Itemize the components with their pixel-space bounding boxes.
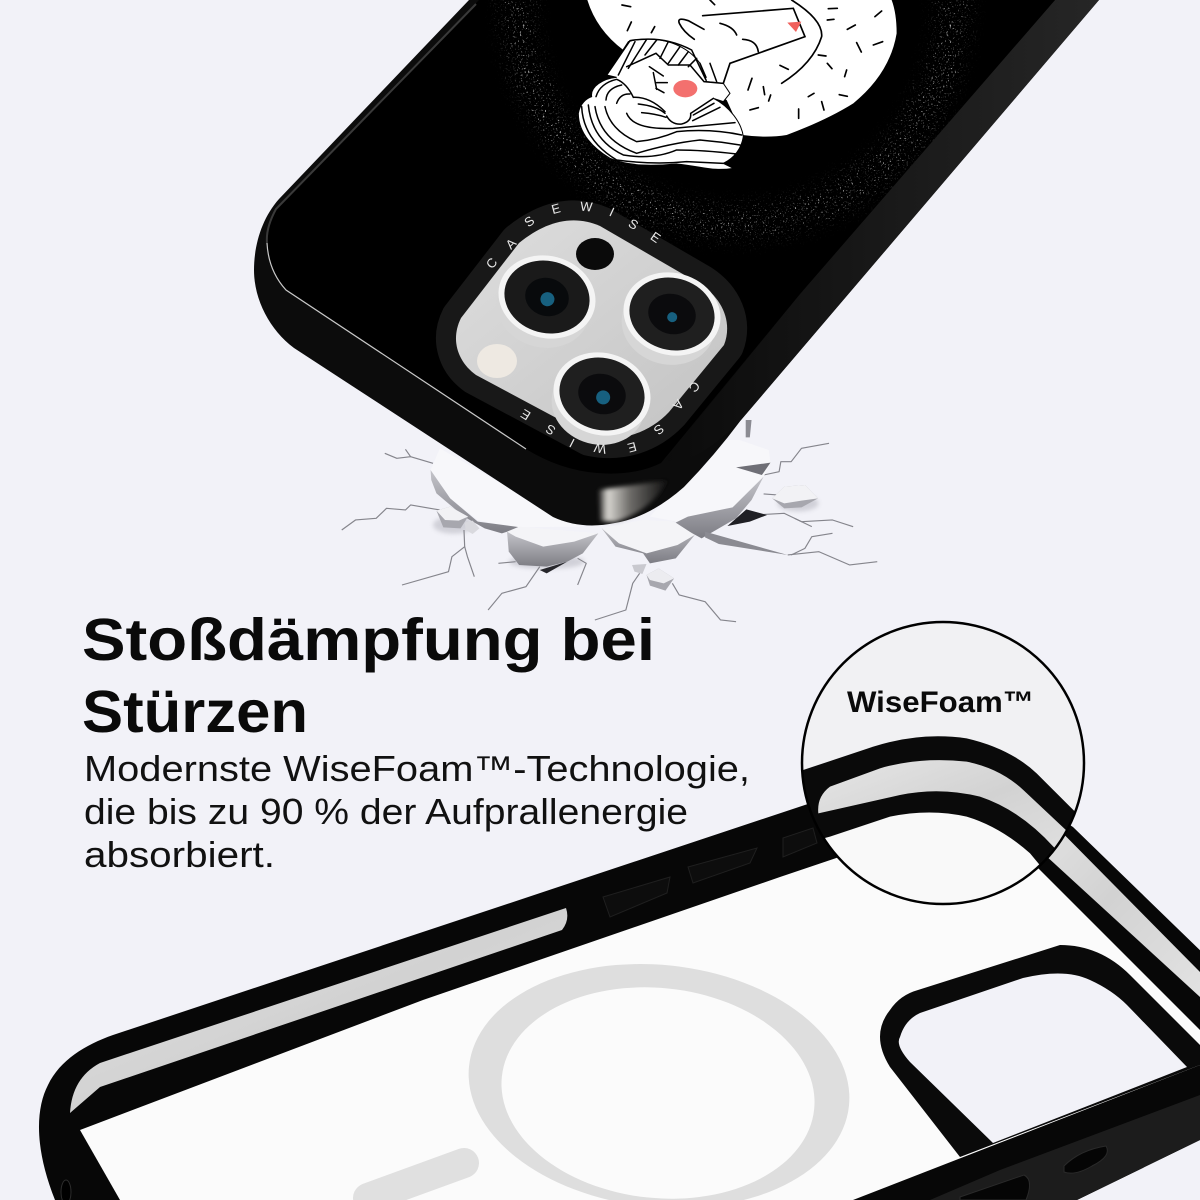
upper phone in black case (254, 0, 1099, 525)
bottom speaker ports (960, 1146, 1107, 1200)
CASEWISE ring lettering top: S (521, 213, 538, 230)
CASEWISE ring lettering bottom: S (650, 421, 667, 438)
gloss edge (267, 4, 476, 243)
illustration: moon character (578, 0, 897, 169)
CASEWISE ring lettering top (487, 202, 661, 268)
flash (477, 344, 517, 378)
heading (82, 607, 655, 745)
CASEWISE ring lettering bottom: S (543, 421, 558, 438)
speckle halo (517, 0, 953, 223)
bottom band sheen (930, 1095, 1200, 1200)
face lines (622, 0, 883, 118)
CASEWISE ring lettering top: A (502, 235, 519, 252)
left port (61, 1180, 71, 1200)
magsafe ring centre (502, 987, 814, 1199)
magnified corner (803, 736, 1074, 867)
white blob (587, 0, 897, 137)
hair shape (578, 39, 743, 169)
camera island (456, 199, 730, 457)
camera cutout frame (880, 945, 1200, 1157)
circle outline (802, 622, 1084, 904)
left plate edge (431, 470, 521, 533)
side band (740, 0, 1099, 421)
magnifier callout: WiseFoam (800, 620, 1086, 906)
dark wedges (727, 509, 767, 526)
heading: Stürzen (82, 679, 308, 745)
CASEWISE ring lettering top: E (550, 200, 562, 217)
CASEWISE ring lettering top: S (626, 216, 641, 233)
CASEWISE ring lettering top: E (648, 229, 664, 246)
right plate edge (674, 477, 764, 538)
clear back (80, 850, 1200, 1200)
CASEWISE ring lettering bottom: I (567, 436, 577, 451)
CASEWISE ring lettering top: C (483, 255, 500, 272)
callout label: WiseFoam™ (847, 686, 1034, 719)
CASEWISE ring lettering bottom: E (518, 406, 533, 423)
side buttons (603, 828, 817, 917)
red cheek (673, 80, 697, 97)
soft shadows (433, 495, 819, 569)
CASEWISE ring lettering bottom: A (670, 397, 687, 413)
foam gap left (70, 908, 567, 1113)
CASEWISE ring lettering top: I (607, 204, 617, 219)
metal plate with ring border (456, 220, 727, 438)
small stones (436, 485, 818, 591)
lens 2 (624, 272, 720, 365)
back panel (267, 0, 1055, 474)
microphone hole (576, 238, 614, 270)
fragment left (507, 527, 598, 567)
black frame (39, 780, 1200, 1200)
body text: Modernste WiseFoam™-Technologie, (84, 748, 750, 789)
CASEWISE ring lettering bottom (520, 382, 699, 454)
fragment right (602, 520, 695, 563)
magsafe ring (468, 964, 850, 1200)
heading: Stoßdämpfung bei (82, 607, 655, 673)
corner highlight (598, 480, 668, 522)
body text (84, 748, 750, 875)
CASEWISE ring lettering bottom: W (592, 440, 608, 457)
body text: die bis zu 90 % der Aufprallenergie (84, 791, 688, 832)
hair lines (582, 39, 742, 163)
lens 3 (552, 352, 650, 445)
lens 1 (498, 256, 596, 339)
body text: absorbiert. (84, 834, 275, 875)
CASEWISE ring lettering bottom: C (686, 378, 703, 395)
cracked ground impact (342, 420, 877, 622)
nose mark (787, 22, 801, 32)
case body (254, 0, 1099, 525)
camera cutout opening (899, 973, 1187, 1143)
lower phone case interior (39, 780, 1200, 1200)
gloss edge lower (267, 243, 526, 449)
magsafe alignment pill (368, 1163, 464, 1198)
left plate (431, 448, 581, 527)
crack lines (342, 443, 877, 622)
CASEWISE ring lettering bottom: E (626, 439, 638, 456)
right plate (650, 440, 770, 522)
CASEWISE ring lettering top: W (580, 199, 594, 215)
foam gap right (1048, 836, 1200, 997)
